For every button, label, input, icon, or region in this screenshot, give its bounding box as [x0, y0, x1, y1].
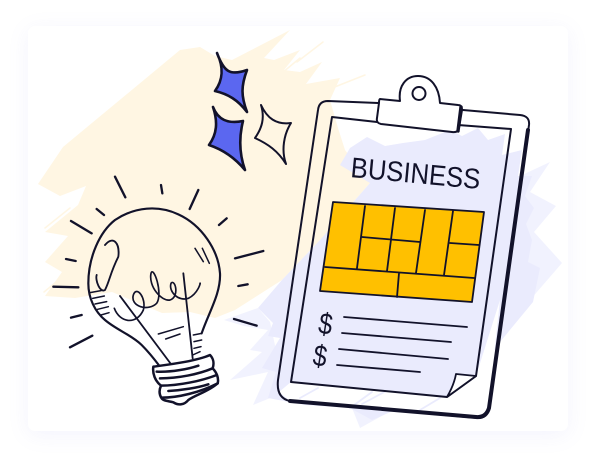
- filament: [120, 273, 193, 365]
- clipboard: [278, 76, 529, 418]
- blue sparkle top: [215, 53, 247, 112]
- card background: [28, 26, 568, 431]
- clip hole: [412, 87, 426, 100]
- orange grid: [320, 202, 484, 302]
- dollar sign one: $: [316, 306, 335, 342]
- clip shadow edge: [458, 107, 461, 131]
- glass highlight: [96, 241, 119, 291]
- clip: [377, 76, 462, 132]
- lavender brush stroke: [224, 128, 562, 428]
- lavender wisps on board margin: [300, 388, 440, 410]
- screw base: [153, 355, 218, 404]
- blue sparkle bottom: [209, 107, 245, 170]
- heading: BUSINESS: [349, 152, 482, 196]
- board thick edge: [290, 130, 528, 417]
- board outline: [278, 101, 529, 418]
- white board margin: [279, 300, 500, 418]
- paper: [291, 117, 511, 397]
- outline sparkle: [255, 105, 291, 164]
- glass outline: [88, 208, 220, 367]
- paper curl: [447, 374, 476, 397]
- dollar sign two: $: [311, 338, 330, 374]
- cream brush stroke: [38, 30, 370, 318]
- rays: [53, 177, 263, 347]
- text lines: [337, 317, 467, 372]
- hatching: [90, 248, 209, 355]
- light bulb: [53, 177, 263, 367]
